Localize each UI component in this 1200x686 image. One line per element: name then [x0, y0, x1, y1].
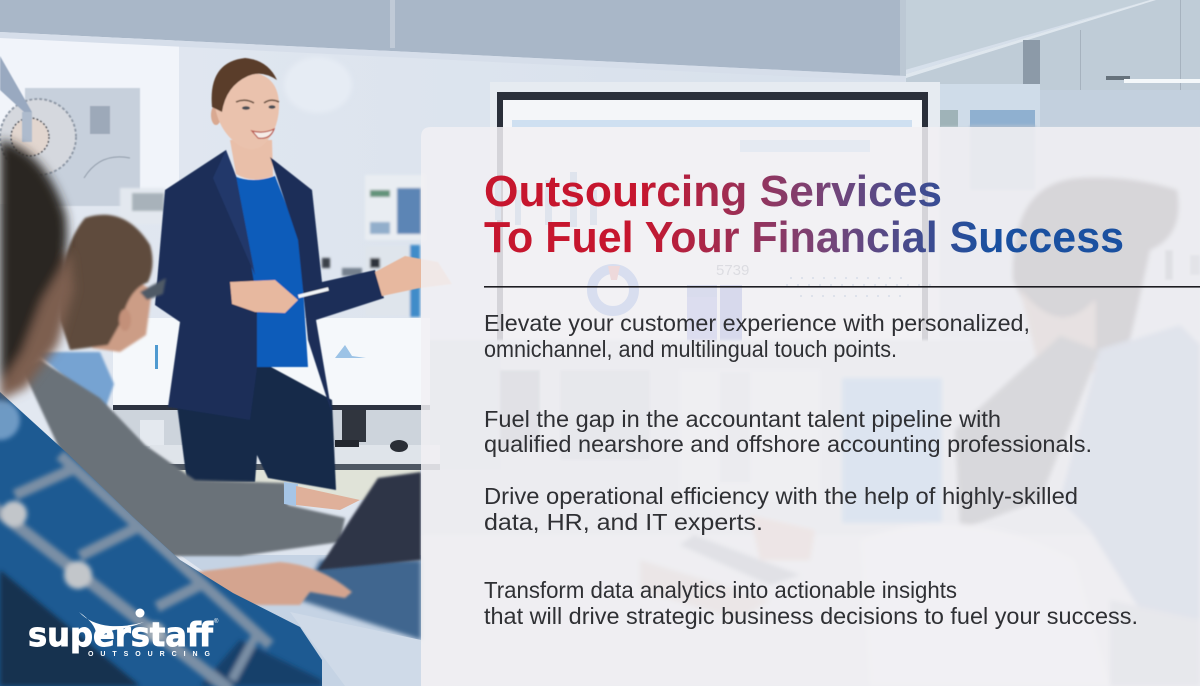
plaid shirt	[0, 380, 330, 686]
ceiling	[0, 0, 1150, 82]
screen bar chart	[495, 172, 597, 227]
presenter lapel	[213, 150, 255, 275]
presenter neck	[230, 140, 273, 180]
presenter head	[214, 72, 279, 149]
logo swoosh	[79, 612, 144, 640]
logo: superstaff outsourcing	[28, 608, 219, 658]
accountant talent item	[484, 406, 1092, 457]
man two cuff and hand	[284, 482, 298, 506]
right side seated woman	[640, 178, 1200, 686]
presenter hair	[212, 58, 277, 112]
engineering diagram board	[0, 56, 140, 206]
presenter woman	[155, 58, 452, 490]
operational efficiency item: Drive operational efficiency with the help of highly-skilled	[484, 483, 1078, 509]
man with glasses	[22, 215, 360, 556]
text block: services list	[484, 310, 1138, 629]
front man with plaid shirt	[0, 140, 352, 686]
logo dot	[136, 608, 144, 618]
translucent text panel	[421, 127, 1200, 686]
screen scatter dots	[786, 278, 936, 296]
man two blue collar	[36, 352, 114, 412]
operational efficiency item: data, HR, and IT experts.	[484, 509, 763, 535]
logo registered mark: ®	[214, 618, 219, 625]
front man head	[0, 140, 74, 400]
operational efficiency item	[484, 483, 1078, 535]
large wall monitor	[490, 82, 940, 422]
screen number: 5739	[716, 262, 749, 279]
presenter ear	[211, 105, 221, 125]
presenter eyes and brows	[236, 100, 279, 103]
distant wall equipment	[120, 175, 425, 317]
soft ceiling lamp	[284, 57, 352, 113]
man two ear	[119, 309, 131, 331]
presenter smile	[252, 129, 274, 138]
title divider	[484, 286, 1200, 288]
presenter blue top	[234, 176, 308, 367]
presenter hands and pen	[230, 280, 298, 313]
title	[484, 167, 1124, 262]
customer experience item: Elevate your customer experience with personalized,	[484, 310, 1030, 336]
logo wordmark: superstaff	[28, 615, 214, 654]
man two grey sweater	[22, 360, 345, 556]
customer experience item	[484, 310, 1030, 362]
data analytics item: that will drive strategic business decisions to fuel your success.	[484, 603, 1138, 629]
upper right glass wall	[906, 0, 1200, 127]
logo tagline: OUTSOURCING	[88, 651, 211, 658]
accountant talent item: qualified nearshore and offshore accounting professionals.	[484, 431, 1092, 457]
screen bars	[687, 285, 742, 345]
title: Outsourcing Services	[484, 167, 942, 216]
left white wall section	[0, 34, 179, 204]
front man hand	[195, 562, 352, 605]
screen donut chart	[592, 266, 634, 311]
accountant talent item: Fuel the gap in the accountant talent pipeline with	[484, 406, 1001, 432]
presenter blazer left side	[155, 150, 257, 420]
lower middle desks behind panel	[421, 340, 1200, 686]
customer experience item: omnichannel, and multilingual touch points.	[484, 336, 897, 362]
presenter trousers	[177, 360, 336, 490]
right side background equipment	[940, 125, 1200, 337]
man two glasses	[140, 278, 166, 300]
man two hair	[60, 215, 153, 350]
data analytics item	[484, 577, 1138, 629]
data analytics item: Transform data analytics into actionable insights	[484, 577, 957, 603]
man two face	[60, 215, 166, 352]
title: To Fuel Your Financial Success	[484, 213, 1124, 262]
open laptop	[318, 472, 421, 570]
presenter blazer right side	[270, 157, 384, 414]
lower-left desk and monitors	[113, 318, 440, 686]
